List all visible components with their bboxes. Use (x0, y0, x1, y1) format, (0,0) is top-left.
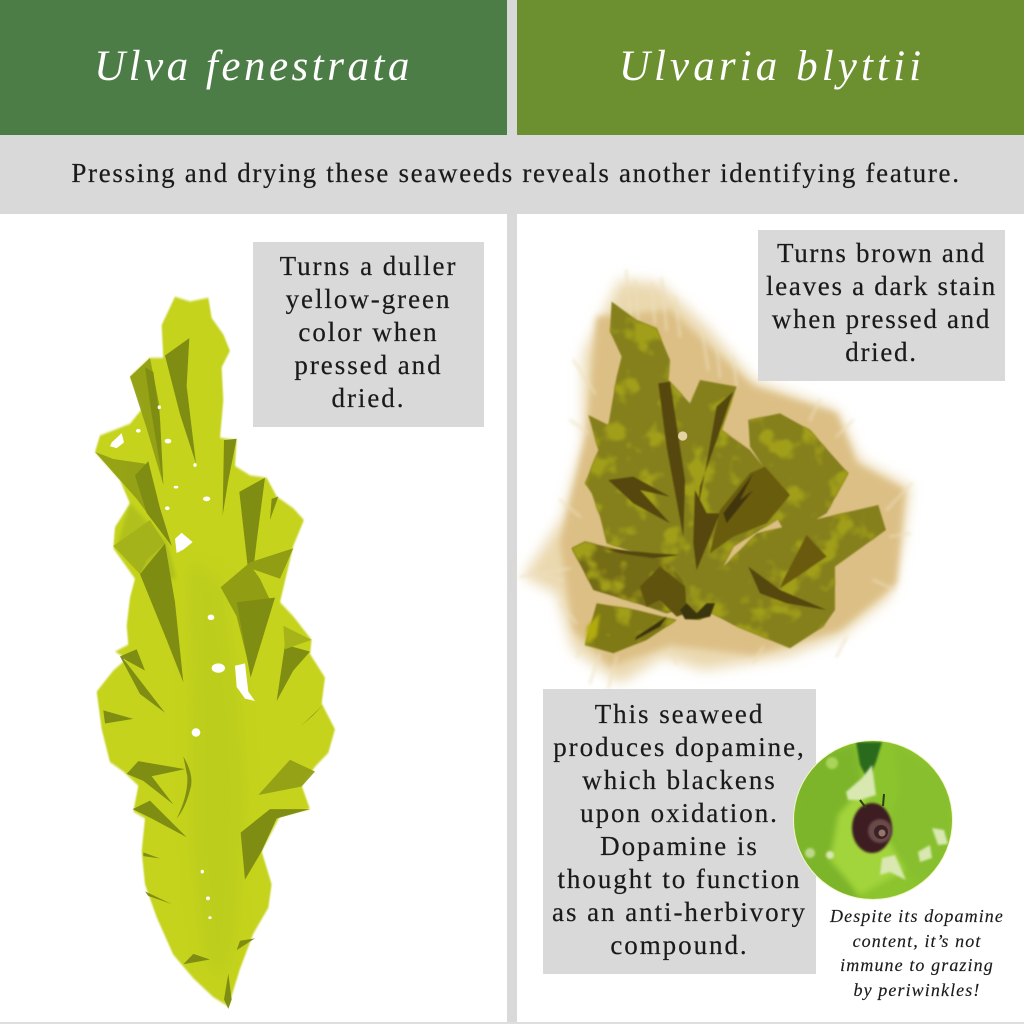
subtitle band: Pressing and drying these seaweeds reveals another identifying feature. (71, 158, 961, 188)
callout: Ulvaria dried color: dried. (845, 337, 918, 367)
bottom rule (0, 1022, 1024, 1024)
subtitle band (0, 135, 1024, 214)
icon: snail on seaweed photo (793, 740, 953, 900)
thallus (585, 302, 886, 648)
callout: Ulva dried color: Turns a duller (280, 251, 457, 281)
callout: dopamine: This seaweed (595, 699, 764, 729)
column divider (507, 0, 517, 1024)
callout: dopamine: produces dopamine, (553, 732, 806, 762)
yellow mottling (572, 302, 886, 653)
callout: dopamine: which blackens (582, 765, 777, 795)
brown stain, core (560, 310, 905, 667)
callout: dopamine: upon oxidation. (580, 798, 779, 828)
holes (110, 405, 255, 919)
brown stain, soft outer (523, 280, 910, 683)
icon: Ulva fenestrata pressed specimen (95, 297, 335, 1009)
header: Ulva fenestrata: Ulva fenestrata (94, 43, 413, 90)
callout: Ulva dried color: color when (298, 317, 439, 347)
darker midrib tone (187, 560, 247, 983)
callout: dopamine: compound. (610, 930, 749, 960)
pale lobe tone (117, 504, 177, 579)
folds (95, 338, 323, 1009)
caption: periwinkles: immune to grazing (840, 955, 994, 975)
snail shell (852, 803, 892, 853)
callout: dopamine: thought to function (557, 864, 802, 894)
header: Ulvaria blyttii (520, 0, 1024, 135)
callout: Ulvaria dried color: Turns brown and (777, 238, 986, 268)
header: Ulva fenestrata (0, 0, 507, 135)
caption: periwinkles (830, 906, 1004, 1000)
callout: Ulvaria dried color: leaves a dark stain (766, 271, 997, 301)
caption: periwinkles: by periwinkles! (854, 980, 980, 1000)
header: Ulvaria blyttii: Ulvaria blyttii (619, 43, 925, 90)
caption: periwinkles: content, it’s not (853, 931, 981, 951)
callout: Ulva dried color: yellow-green (286, 284, 451, 314)
callout: Ulva dried color (253, 242, 484, 427)
caption: periwinkles: Despite its dopamine (830, 906, 1004, 926)
callout: Ulvaria dried color (758, 230, 1005, 381)
callout: dopamine: Dopamine is (600, 831, 759, 861)
callout: Ulva dried color: dried. (332, 383, 405, 413)
callout: dopamine (543, 689, 816, 974)
dark folds (603, 382, 827, 640)
callout: Ulvaria dried color: when pressed and (772, 304, 991, 334)
callout: Ulva dried color: pressed and (294, 350, 443, 380)
brush streaks (520, 270, 912, 688)
callout: dopamine: as an anti-herbivory (552, 897, 807, 927)
icon: Ulvaria blyttii pressed specimen with stain (520, 270, 912, 688)
